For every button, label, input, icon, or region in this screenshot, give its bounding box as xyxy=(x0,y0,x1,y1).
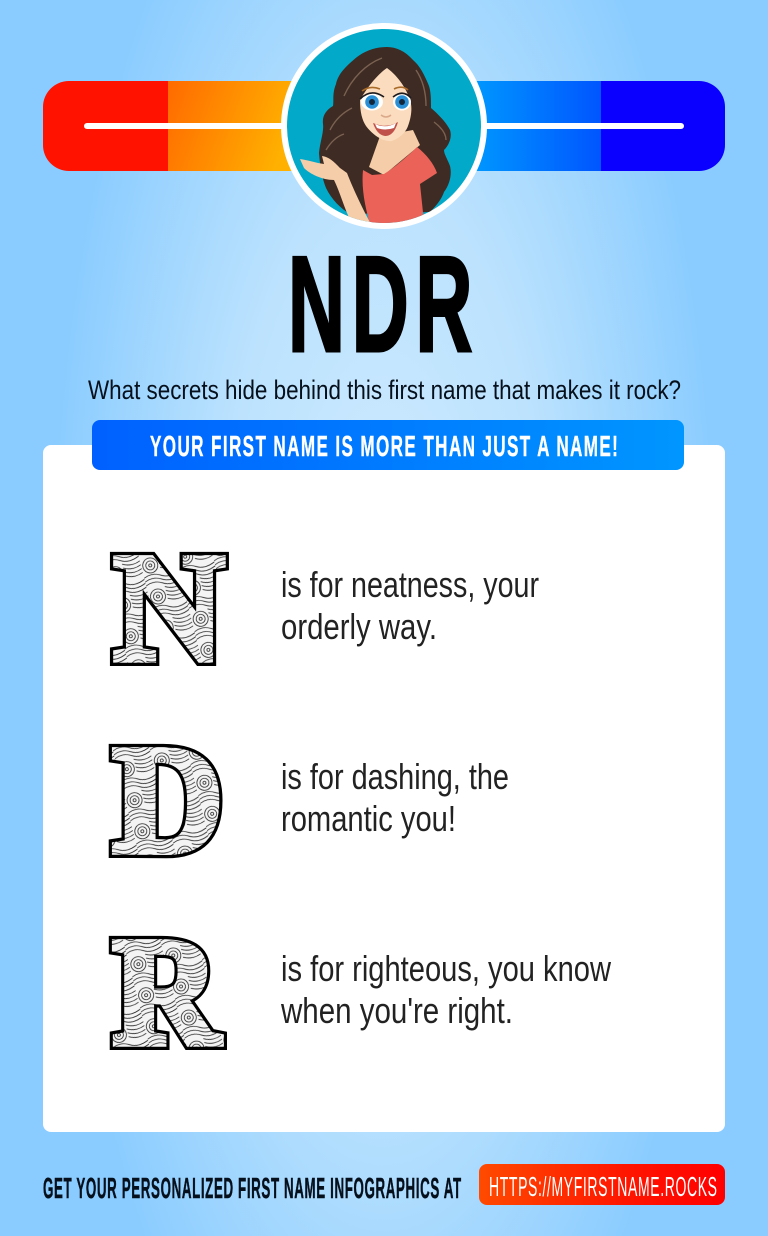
letter R row xyxy=(113,908,612,1077)
letter D row: romantic you! xyxy=(281,798,456,839)
letter N row: orderly way. xyxy=(281,606,437,647)
eyes xyxy=(360,87,411,110)
letter N row xyxy=(114,524,539,693)
icon: ornamental letter N: N xyxy=(114,524,224,693)
shirt xyxy=(363,147,437,224)
icon: ornamental letter R: R xyxy=(113,908,220,1077)
letter R row: is for righteous, you know xyxy=(281,948,612,989)
icon: ornamental letter D: D xyxy=(113,716,223,885)
neck xyxy=(369,130,420,175)
letter N row: is for neatness, your xyxy=(281,564,539,605)
footer call to action: GET YOUR PERSONALIZED FIRST NAME INFOGRAPHICS AT xyxy=(43,1172,461,1204)
arm and hand xyxy=(300,156,371,224)
letter R row: when you're right. xyxy=(280,990,513,1031)
footer url button: HTTPS://MYFIRSTNAME.ROCKS xyxy=(489,1171,717,1202)
letter D row xyxy=(113,716,509,885)
hair xyxy=(319,47,451,214)
letter D row: is for dashing, the xyxy=(281,756,509,797)
face xyxy=(360,68,411,141)
header colour bar xyxy=(43,81,725,171)
icon: ornamental letter D: D xyxy=(113,716,223,885)
icon: ornamental letter N: N xyxy=(114,524,224,693)
title: NDR xyxy=(288,227,472,380)
mouth xyxy=(373,122,398,136)
icon: ornamental letter R: R xyxy=(113,908,220,1077)
banner xyxy=(92,420,684,470)
content panel xyxy=(43,445,725,1132)
banner: YOUR FIRST NAME IS MORE THAN JUST A NAME! xyxy=(150,430,618,463)
avatar portrait xyxy=(281,23,487,229)
